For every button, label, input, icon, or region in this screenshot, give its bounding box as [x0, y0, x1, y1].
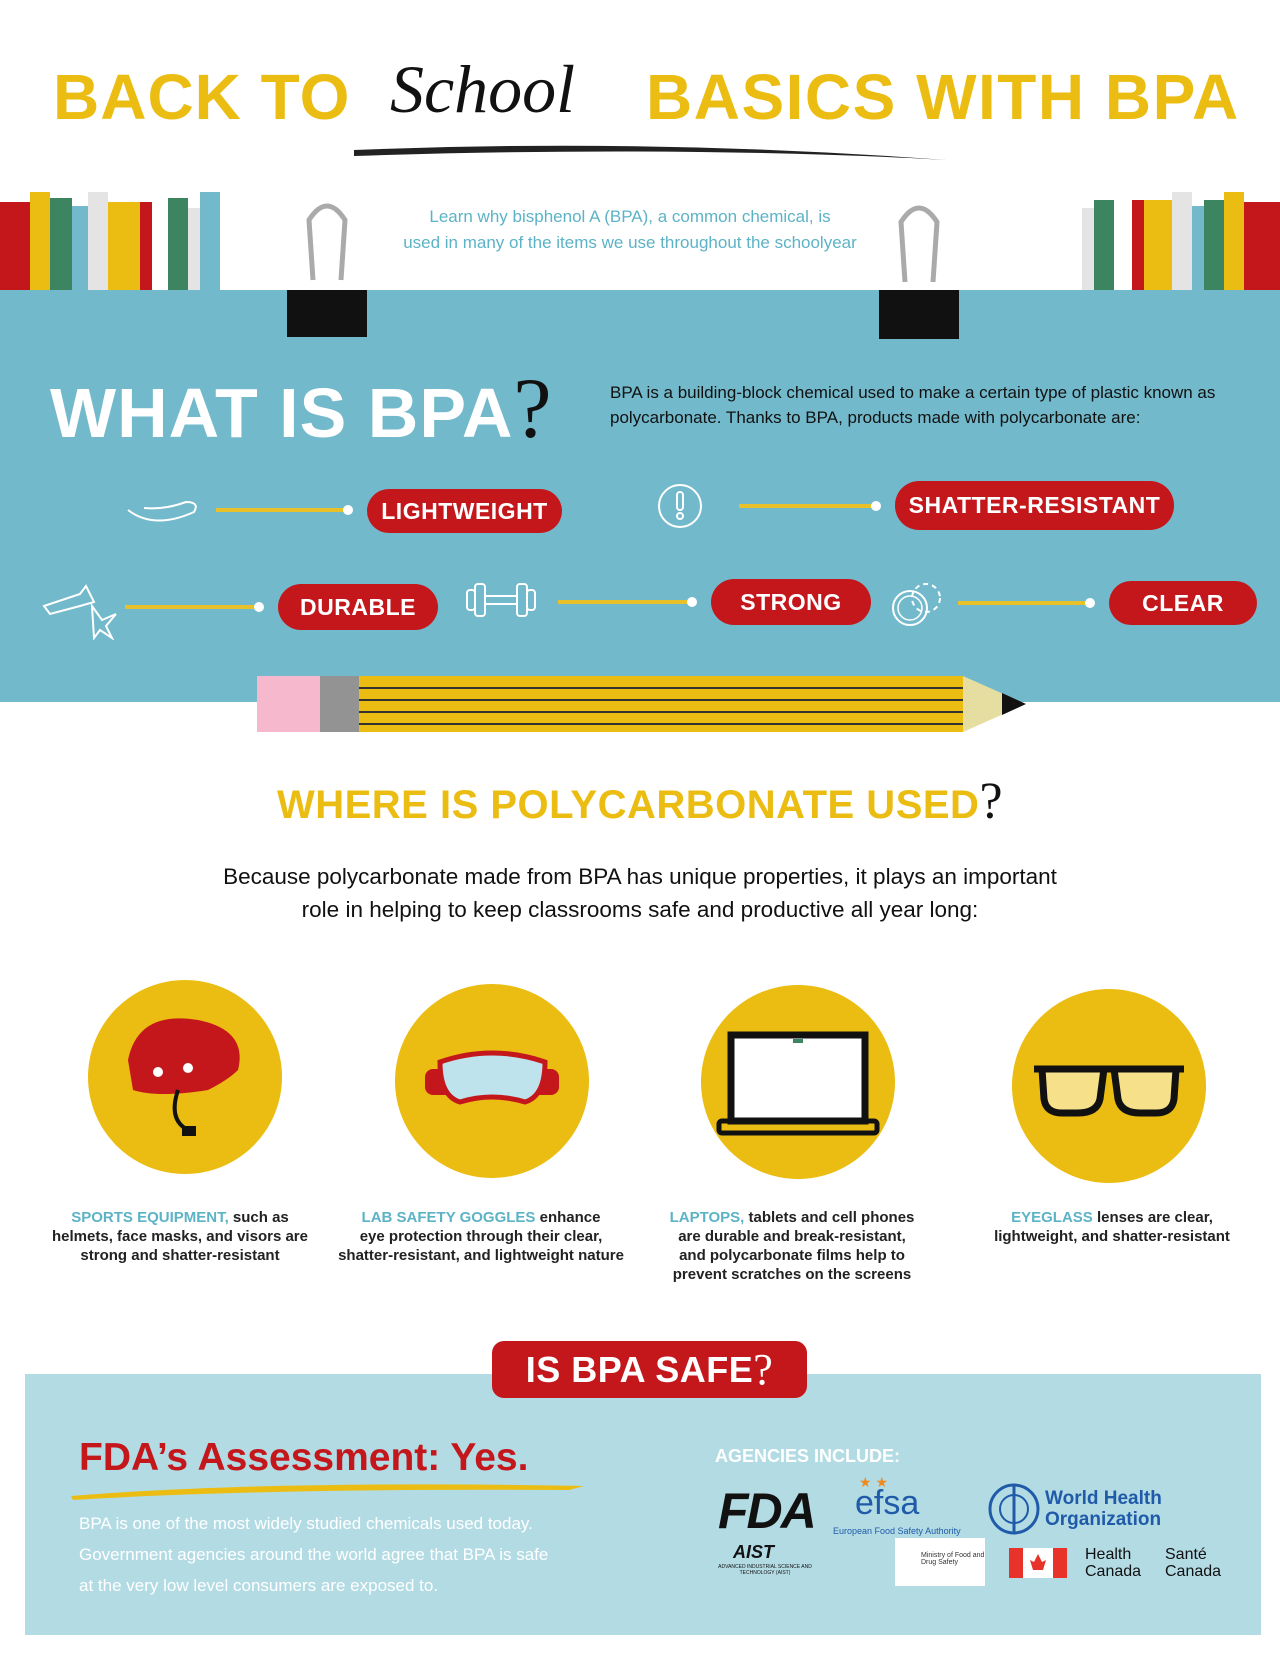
caption: eyeglass: EYEGLASS lenses are clear, — [1011, 1209, 1213, 1226]
logos: FDA — [718, 1483, 815, 1539]
title: BACK TO — [53, 61, 350, 133]
caption: goggles: LAB SAFETY GOGGLES enhance — [362, 1209, 600, 1226]
icon: rings — [892, 583, 941, 626]
FDA body — [79, 1514, 548, 1595]
title: BASICS WITH BPA — [646, 61, 1240, 133]
pill: is BPA safe — [492, 1341, 807, 1398]
pill: durable — [278, 584, 438, 630]
icon: hammer — [42, 584, 117, 640]
logos: Organization — [1045, 1509, 1161, 1530]
pill: lightweight: LIGHTWEIGHT — [381, 498, 548, 524]
pill: clear: CLEAR — [1142, 590, 1224, 616]
panel: what is BPA — [0, 290, 1280, 702]
logos: Ministry of Food and Drug Safety — [921, 1552, 984, 1566]
logos: Canada — [1085, 1563, 1141, 1580]
logos — [718, 1474, 1222, 1586]
icon: dumbbell — [466, 583, 536, 617]
subtitle: used in many of the items we use throughout the schoolyear — [403, 233, 857, 252]
icon: goggles — [395, 984, 589, 1178]
icon: exclamation — [658, 484, 702, 528]
caption: goggles: shatter-resistant, and lightweight nature — [338, 1247, 624, 1264]
intro paragraph: Because polycarbonate made from BPA has unique properties, it plays an important — [223, 864, 1057, 889]
agencies label: AGENCIES INCLUDE: — [715, 1446, 900, 1466]
intro paragraph: role in helping to keep classrooms safe and productive all year long: — [302, 897, 978, 922]
caption: sports: SPORTS EQUIPMENT, such as — [71, 1209, 289, 1226]
caption: goggles: eye protection through their clear, — [360, 1228, 602, 1245]
caption: laptops: are durable and break-resistant, — [678, 1228, 906, 1245]
caption: sports: helmets, face masks, and visors are — [52, 1228, 308, 1245]
pill: shatter-resistant — [895, 481, 1174, 530]
logos: Santé — [1165, 1546, 1207, 1563]
icon: eyeglasses — [1012, 989, 1206, 1183]
intro paragraph — [223, 864, 1057, 922]
logos: European Food Safety Authority — [833, 1526, 961, 1536]
caption: sports: strong and shatter-resistant — [80, 1247, 280, 1264]
icon: helmet — [88, 980, 282, 1174]
clips — [287, 204, 367, 337]
caption: eyeglass — [994, 1209, 1230, 1245]
subtitle — [403, 207, 857, 252]
caption: laptops: LAPTOPS, tablets and cell phones — [670, 1209, 914, 1226]
icon: laptop — [701, 985, 895, 1179]
description: BPA is a building-block chemical used to make a certain type of plastic known as polycarbonate. Thanks to BPA, products made with polycarbonate are: — [610, 383, 1215, 427]
title: School — [390, 51, 575, 127]
FDA body: at the very low level consumers are exposed to. — [79, 1576, 438, 1595]
FDA heading: FDA’s Assessment: Yes. — [79, 1436, 528, 1479]
pill: clear — [1109, 581, 1257, 625]
caption: sports — [52, 1209, 308, 1264]
books right — [1082, 192, 1280, 290]
logos: Canada — [1165, 1563, 1221, 1580]
pencil — [257, 676, 1026, 732]
pill: durable: DURABLE — [300, 594, 416, 620]
panel: is BPA safe — [25, 1374, 1261, 1635]
logos: efsa — [855, 1484, 919, 1522]
pill: lightweight — [367, 489, 562, 533]
title — [53, 51, 1240, 133]
subtitle: Learn why bisphenol A (BPA), a common chemical, is — [429, 207, 831, 226]
logos: Health — [1085, 1546, 1131, 1563]
FDA body: Government agencies around the world agree that BPA is safe — [79, 1545, 548, 1564]
brush stroke — [354, 146, 945, 160]
pill: strong: STRONG — [740, 588, 842, 614]
caption: laptops: prevent scratches on the screens — [673, 1266, 911, 1283]
pill: shatter-resistant: SHATTER-RESISTANT — [909, 492, 1160, 518]
pill: is BPA safe: IS BPA SAFE — [526, 1348, 753, 1390]
icon: feather — [128, 501, 197, 522]
caption: laptops — [670, 1209, 914, 1283]
heading: WHAT IS BPA? — [50, 360, 553, 456]
caption: eyeglass: lightweight, and shatter-resistant — [994, 1228, 1230, 1245]
pill: strong — [711, 579, 871, 625]
caption: laptops: and polycarbonate films help to — [679, 1247, 905, 1264]
FDA body: BPA is one of the most widely studied chemicals used today. — [79, 1514, 533, 1533]
logos: World Health — [1045, 1488, 1162, 1509]
logos: AIST — [733, 1542, 774, 1562]
logos: ★ ★ — [859, 1474, 888, 1490]
books left — [0, 192, 220, 290]
heading: where is polycarbonate used: WHERE IS POLYCARBONATE USED? — [277, 773, 1003, 830]
logos: ADVANCED INDUSTRIAL SCIENCE AND TECHNOLOGY (AIST) — [718, 1564, 812, 1576]
pill: is BPA safe: ? — [753, 1345, 773, 1394]
caption: goggles — [338, 1209, 624, 1264]
